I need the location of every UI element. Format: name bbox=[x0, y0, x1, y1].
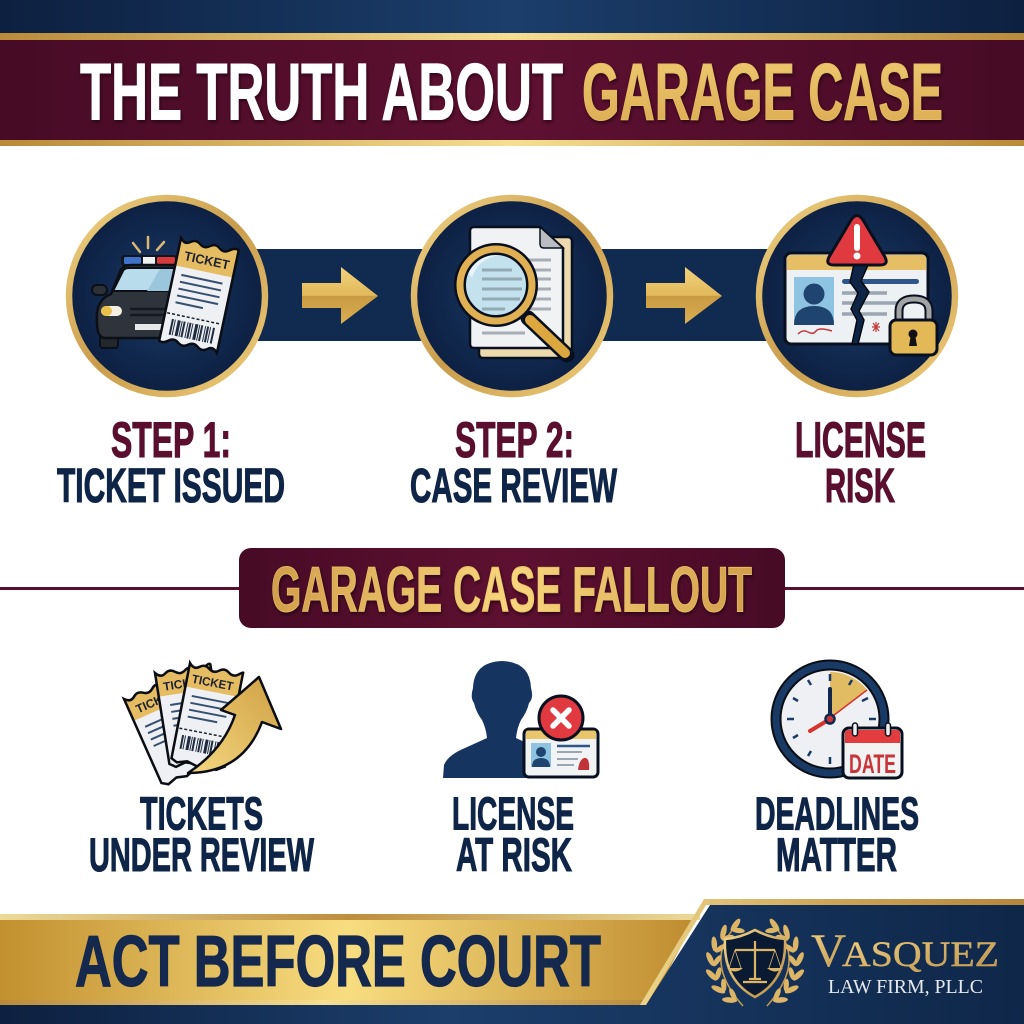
tickets under review label: UNDER REVIEW bbox=[89, 828, 314, 881]
license risk label bbox=[795, 412, 926, 513]
icon: tickets under review: TICKET bbox=[191, 672, 235, 694]
icon: clock and calendar bbox=[776, 665, 902, 779]
logo wordmark: vasquez: V bbox=[811, 925, 846, 977]
deadlines matter label: DEADLINES bbox=[755, 788, 919, 840]
ticket bbox=[159, 237, 239, 354]
step 1 icon: police car and ticket bbox=[69, 198, 265, 394]
step 1 label: STEP 1: bbox=[111, 412, 231, 468]
license at risk label: LICENSE bbox=[452, 788, 574, 840]
top navy band bbox=[0, 0, 1024, 34]
step 2 label: CASE REVIEW bbox=[410, 460, 617, 513]
tickets under review label bbox=[89, 788, 314, 881]
logo: laurel wreath bbox=[704, 917, 745, 1006]
icon: tickets under review bbox=[124, 662, 281, 787]
title text: the truth about: THE TRUTH ABOUT bbox=[80, 48, 563, 138]
deadlines matter label bbox=[755, 788, 919, 881]
call to action banner: ACT BEFORE COURT bbox=[75, 922, 601, 1002]
bottom navy band bbox=[0, 1004, 641, 1024]
process connector band bbox=[255, 249, 775, 341]
license risk label: RISK bbox=[825, 460, 895, 513]
logo wordmark: law firm, pllc: LAW FIRM, PLLC bbox=[828, 976, 983, 998]
license at risk label bbox=[452, 788, 574, 881]
logo wordmark: vasquez bbox=[811, 925, 999, 977]
license risk icon: cracked id card, warning, lock bbox=[759, 198, 955, 394]
firm logo panel bbox=[640, 899, 1024, 1024]
icon: tickets under review: TICK bbox=[162, 676, 192, 694]
call to action banner bbox=[0, 914, 700, 1005]
ticket: TICKET bbox=[183, 248, 231, 273]
arrow 1 bbox=[302, 267, 378, 324]
icon: person and license at risk bbox=[443, 661, 598, 778]
tickets under review label: TICKETS bbox=[140, 788, 263, 840]
step 1 label: TICKET ISSUED bbox=[57, 460, 285, 513]
fallout divider line bbox=[0, 587, 1024, 590]
step 1 label bbox=[57, 412, 285, 513]
deadlines matter label: MATTER bbox=[776, 828, 897, 881]
fallout heading bbox=[239, 548, 785, 628]
step 2 label: STEP 2: bbox=[455, 412, 574, 468]
step 2 icon: document and magnifier bbox=[414, 198, 610, 394]
icon: tickets under review: TICK bbox=[134, 692, 165, 716]
logo wordmark: vasquez: ASQUEZ bbox=[842, 934, 999, 974]
step 2 label bbox=[410, 412, 617, 513]
title banner bbox=[0, 33, 1024, 146]
icon: clock and calendar: DATE bbox=[849, 749, 896, 779]
license at risk label: AT RISK bbox=[456, 828, 572, 881]
arrow 2 bbox=[646, 267, 722, 324]
license risk label: LICENSE bbox=[795, 412, 926, 468]
logo: shield with scales bbox=[725, 930, 785, 997]
logo: laurel wreath right bbox=[765, 917, 806, 1006]
